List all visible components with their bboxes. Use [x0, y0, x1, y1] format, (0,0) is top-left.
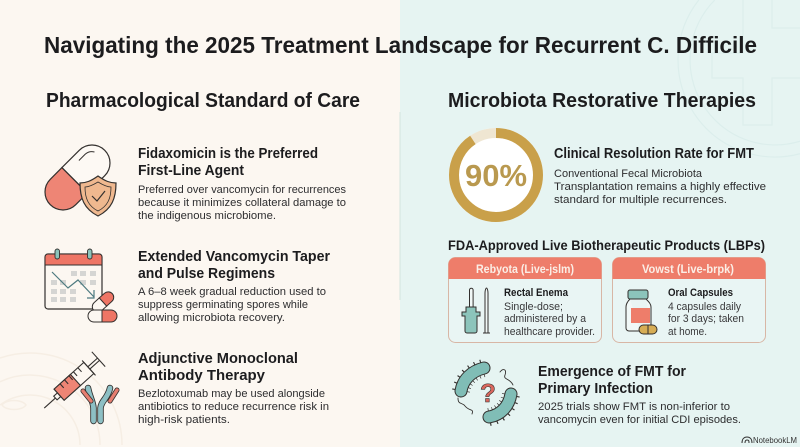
- icon: calendar with downward trend and pills: [45, 249, 117, 322]
- text: vancomycin taper: suppress germinating spores while: [138, 299, 308, 311]
- icon: bottle and capsule: [626, 290, 657, 334]
- card: Vowst: Vowst (Live-brpk): [642, 264, 734, 276]
- divider: [399, 112, 401, 300]
- chart: 90% donut: 90%: [465, 158, 527, 193]
- text: clinical resolution rate: standard for multiple recurrences.: [554, 194, 727, 206]
- card: Vowst: for 3 days; taken: [668, 313, 744, 325]
- icon: capsule and shield: [38, 138, 117, 217]
- heading: microbiota restorative therapies: Microbiota Restorative Therapies: [448, 90, 756, 112]
- card: Rebyota: [448, 258, 602, 342]
- panel: left background: [0, 0, 400, 447]
- card: Rebyota: healthcare provider.: [504, 326, 595, 338]
- chart: 90% donut: [449, 128, 543, 222]
- text: fidaxomicin: Fidaxomicin is the Preferred: [138, 146, 318, 162]
- icon: bacteria with question mark: ?: [480, 378, 496, 408]
- panel: right background: [400, 0, 800, 447]
- card: Vowst: at home.: [668, 326, 707, 338]
- text: FMT for primary infection: 2025 trials show FMT is non-inferior to: [538, 401, 730, 413]
- text: vancomycin taper: and Pulse Regimens: [138, 266, 275, 282]
- text: fidaxomicin: because it minimizes collateral damage to: [138, 197, 346, 209]
- text: monoclonal antibody: [138, 351, 329, 426]
- text: monoclonal antibody: Adjunctive Monoclonal: [138, 351, 298, 367]
- text: vancomycin taper: allowing microbiota recovery.: [138, 312, 285, 324]
- card: Vowst: 4 capsules daily: [668, 301, 742, 313]
- text: monoclonal antibody: antibiotics to reduce recurrence risk in: [138, 401, 329, 413]
- card: Vowst: Oral Capsules: [668, 287, 733, 299]
- text: vancomycin taper: [138, 249, 330, 324]
- text: monoclonal antibody: Bezlotoxumab may be used alongside: [138, 388, 325, 400]
- text: FMT for primary infection: Primary Infection: [538, 381, 653, 397]
- text: clinical resolution rate: [554, 146, 766, 206]
- text: clinical resolution rate: Conventional Fecal Microbiota: [554, 168, 703, 180]
- text: clinical resolution rate: Transplantation remains a highly effective: [554, 181, 766, 193]
- text: monoclonal antibody: Antibody Therapy: [138, 368, 265, 384]
- heading: pharmacological standard of care: Pharmacological Standard of Care: [46, 90, 360, 112]
- card: Vowst: [612, 258, 766, 342]
- text: vancomycin taper: Extended Vancomycin Taper: [138, 249, 330, 265]
- text: FMT for primary infection: Emergence of FMT for: [538, 364, 686, 380]
- text: fidaxomicin: Preferred over vancomycin for recurrences: [138, 184, 346, 196]
- text: FMT for primary infection: [538, 364, 741, 426]
- card: Rebyota: Rebyota (Live-jslm): [476, 264, 574, 276]
- text: fidaxomicin: the indigenous microbiome.: [138, 210, 276, 222]
- text: fidaxomicin: First-Line Agent: [138, 163, 244, 179]
- title: Navigating the 2025 Treatment Landscape for Recurrent C. Difficile: [44, 32, 757, 58]
- card: Rebyota: administered by a: [504, 313, 586, 325]
- text: clinical resolution rate: Clinical Resolution Rate for FMT: [554, 146, 754, 162]
- text: monoclonal antibody: high-risk patients.: [138, 414, 230, 426]
- text: fidaxomicin: [138, 146, 346, 222]
- heading: FDA-approved LBPs: FDA-Approved Live Biotherapeutic Products (LBPs): [448, 238, 765, 253]
- icon: bacteria with question mark: [458, 368, 513, 417]
- text: vancomycin taper: A 6–8 week gradual reduction used to: [138, 286, 326, 298]
- card: Rebyota: Single-dose;: [504, 301, 563, 313]
- text: FMT for primary infection: vancomycin even for initial CDI episodes.: [538, 414, 741, 426]
- icon: enema: [462, 288, 490, 333]
- card: Rebyota: Rectal Enema: [504, 287, 568, 299]
- logo: NotebookLM: NotebookLM: [753, 435, 797, 445]
- icon: syringe and antibody: [38, 352, 117, 421]
